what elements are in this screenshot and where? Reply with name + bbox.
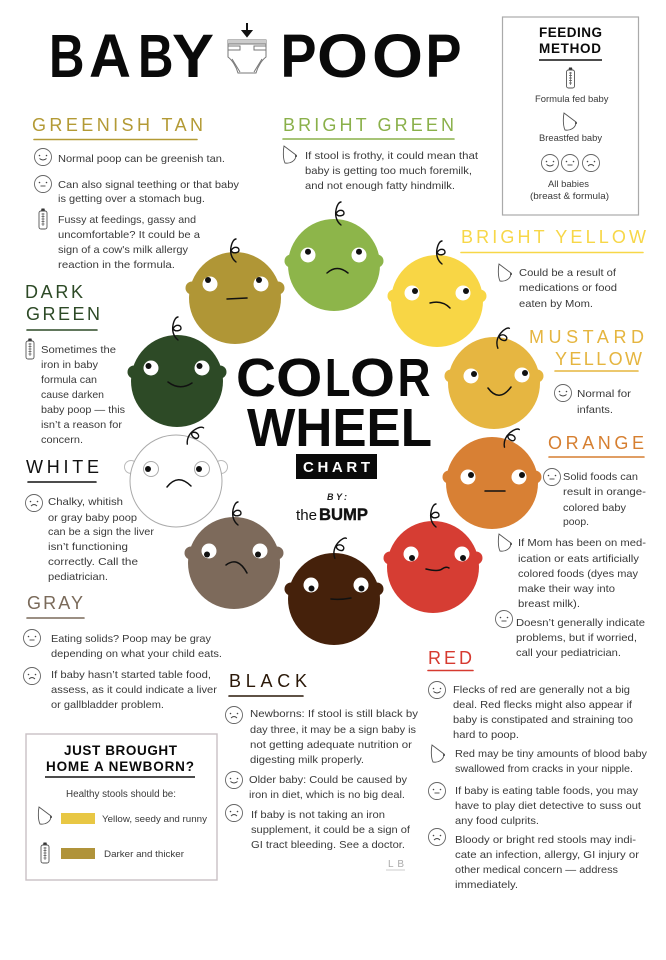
text: frothy stool bbox=[305, 150, 478, 192]
text: frothy stool: and not enough fatty hindmilk. bbox=[305, 180, 455, 192]
section: bright yellow bbox=[461, 227, 646, 310]
text: chalky: pediatrician. bbox=[48, 571, 108, 583]
text: bloody stools: cate an infection, allergy, GI injury or bbox=[455, 849, 640, 861]
icon: breast bbox=[431, 745, 445, 762]
icon: bottle bbox=[566, 68, 574, 88]
heading: color wheel: O bbox=[350, 348, 395, 408]
credit: by the bump: BY: bbox=[327, 492, 347, 502]
heading: red: RED bbox=[428, 648, 472, 668]
text: flecks of red: deal. Red flecks might also appear if bbox=[453, 699, 632, 711]
text: not generally problems: Doesn’t generally indicate bbox=[516, 617, 645, 629]
icon: sad face bbox=[226, 706, 242, 724]
text: iron supplement: supplement, it could be a sign of bbox=[251, 824, 410, 836]
text: healthy stools: Healthy stools should be: bbox=[66, 789, 176, 800]
heading: orange: ORANGE bbox=[548, 433, 644, 453]
text: breastfed baby: Breastfed baby bbox=[539, 133, 602, 144]
text: fussy at feedings bbox=[58, 214, 200, 271]
heading: greenish tan: GREENISH TAN bbox=[32, 115, 203, 135]
baby: red bbox=[384, 504, 482, 613]
text: teething: is getting over a stomach bug. bbox=[58, 193, 205, 205]
text: iron supplement bbox=[251, 809, 410, 851]
credit: by the bump bbox=[296, 492, 368, 524]
signature: LB bbox=[388, 859, 404, 870]
text: normal for infants: infants. bbox=[577, 404, 613, 416]
swatch: dark tan bbox=[61, 848, 95, 859]
heading: mustard yellow bbox=[529, 327, 644, 371]
heading: color wheel bbox=[236, 348, 432, 458]
text: newborns bbox=[250, 708, 419, 766]
baby: bright yellow bbox=[388, 241, 486, 347]
text: eating solids bbox=[51, 633, 222, 660]
heading: bright green: BRIGHT GREEN bbox=[283, 115, 454, 135]
text: fussy at feedings: uncomfortable? It could be a bbox=[58, 229, 200, 241]
text: iron in formula: isn’t a reason for bbox=[41, 419, 123, 431]
icon: smile face bbox=[554, 384, 572, 402]
title: Baby Poop: O bbox=[372, 22, 423, 90]
text: table food: or gallbladder problem. bbox=[51, 699, 164, 711]
baby: black bbox=[284, 536, 384, 645]
text: bloody stools bbox=[455, 834, 640, 891]
section: gray bbox=[24, 593, 222, 711]
text: mom medication: colored foods (dyes may bbox=[518, 568, 639, 580]
text: all babies: All babies bbox=[548, 179, 589, 190]
text: yellow seedy: Yellow, seedy and runny bbox=[102, 814, 207, 825]
baby: greenish tan bbox=[186, 239, 284, 344]
icon: neutral face bbox=[428, 782, 446, 800]
section: mustard yellow bbox=[529, 327, 644, 416]
text: tiny amounts of blood bbox=[455, 748, 648, 775]
label: chart: CHART bbox=[303, 459, 370, 476]
text: all babies: (breast & formula) bbox=[530, 191, 609, 202]
text: mom medication: breast milk). bbox=[518, 598, 580, 610]
heading: newborn: HOME A NEWBORN? bbox=[46, 759, 194, 774]
heading: bright yellow: BRIGHT YELLOW bbox=[461, 227, 646, 247]
section: bright green bbox=[283, 115, 478, 192]
text: formula fed baby: Formula fed baby bbox=[535, 94, 609, 105]
section: white bbox=[26, 457, 155, 583]
title: Baby Poop: P bbox=[280, 22, 316, 90]
heading: feeding method: FEEDING bbox=[539, 25, 602, 40]
baby: bright green bbox=[284, 202, 384, 311]
text: solid foods: colored baby bbox=[563, 502, 627, 514]
title: Baby Poop: A bbox=[89, 22, 131, 90]
panel: feeding method bbox=[502, 17, 638, 215]
text: solid foods bbox=[563, 471, 647, 528]
heading: color wheel: R bbox=[398, 348, 430, 408]
text: chalky: isn’t functioning bbox=[48, 541, 128, 553]
text: bloody stools: immediately. bbox=[455, 879, 518, 891]
text: mom medication: make their way into bbox=[518, 583, 615, 595]
text: all babies bbox=[530, 179, 609, 202]
title: Baby Poop: P bbox=[426, 22, 462, 90]
icon: neutral face bbox=[496, 610, 512, 628]
text: table food bbox=[51, 669, 218, 711]
baby: white bbox=[124, 424, 228, 527]
icon: neutral face bbox=[24, 630, 40, 646]
baby: dark green bbox=[128, 317, 226, 427]
text: medications: eaten by Mom. bbox=[519, 298, 593, 310]
section: dark green bbox=[25, 282, 125, 446]
text: frothy stool: If stool is frothy, it could mean that bbox=[305, 150, 478, 162]
text: darker thicker: Darker and thicker bbox=[104, 849, 184, 860]
heading: feeding method: METHOD bbox=[539, 41, 601, 56]
text: not generally problems: call your pediatrician. bbox=[516, 647, 621, 659]
text: iron in formula: baby poop — this bbox=[41, 404, 125, 416]
heading: color wheel: C bbox=[236, 348, 276, 408]
text: flecks of red: baby is constipated and straining too bbox=[453, 714, 633, 726]
text: newborns: digesting milk properly. bbox=[250, 754, 364, 766]
icon: bottle bbox=[39, 208, 47, 229]
title: Baby Poop: B bbox=[49, 22, 84, 90]
text: mom medication bbox=[518, 537, 647, 610]
text: medications: Could be a result of bbox=[519, 267, 616, 279]
text: teething bbox=[58, 179, 240, 205]
title: Baby Poop: B bbox=[138, 22, 174, 90]
text: iron supplement: GI tract bleeding. See a doctor. bbox=[251, 839, 405, 851]
credit: by the bump: BUMP bbox=[319, 506, 368, 524]
heading: mustard yellow: YELLOW bbox=[555, 349, 642, 369]
text: flecks of red: hard to poop. bbox=[453, 729, 519, 741]
icon: smile face bbox=[34, 148, 52, 166]
text: mom medication: If Mom has been on med- bbox=[518, 537, 647, 549]
heading: dark green: GREEN bbox=[26, 304, 100, 324]
text: not generally problems: problems, but if worried, bbox=[516, 632, 637, 644]
icon: sad face bbox=[24, 668, 40, 684]
text: table foods: any food culprits. bbox=[455, 815, 539, 827]
text: iron in formula: Sometimes the bbox=[41, 344, 116, 356]
text: mom medication: ication or eats artificially bbox=[518, 553, 640, 565]
icon: breast bbox=[283, 146, 297, 163]
text: normal for infants: Normal for bbox=[577, 388, 632, 400]
heading: black: BLACK bbox=[229, 671, 307, 691]
text: newborns: not getting adequate nutrition or bbox=[250, 739, 413, 751]
text: newborns: Newborns: If stool is still black by bbox=[250, 708, 419, 720]
text: older baby: iron in diet, which is no big deal. bbox=[249, 789, 405, 801]
text: iron in formula: cause darken bbox=[41, 389, 104, 401]
text: chalky bbox=[48, 496, 155, 583]
text: chalky: correctly. Call the bbox=[48, 556, 138, 568]
text: iron in formula: concern. bbox=[41, 434, 83, 446]
text: medications bbox=[519, 267, 617, 310]
text: flecks of red: Flecks of red are generally not a big bbox=[453, 684, 630, 696]
heading: gray: GRAY bbox=[27, 593, 83, 613]
section: black bbox=[226, 671, 419, 870]
icon: breast bbox=[498, 264, 512, 281]
icon: bottle bbox=[26, 338, 34, 359]
swatch: yellow bbox=[61, 813, 95, 824]
text: medications: medications or food bbox=[519, 282, 617, 294]
heading: mustard yellow: MUSTARD bbox=[529, 327, 644, 347]
text: normal for infants bbox=[577, 388, 632, 416]
text: iron in formula: formula can bbox=[41, 374, 97, 386]
text: table foods bbox=[455, 785, 641, 827]
icon: three faces bbox=[542, 154, 600, 172]
text: table food: assess, as it could indicate a liver bbox=[51, 684, 218, 696]
text: newborns: day three, it may be a sign baby is bbox=[250, 724, 416, 736]
text: fussy at feedings: reaction in the formula. bbox=[58, 259, 175, 271]
icon: sad face bbox=[226, 804, 242, 822]
title: Baby Poop bbox=[49, 22, 462, 90]
heading: white: WHITE bbox=[26, 457, 99, 477]
icon: smile face bbox=[428, 682, 446, 698]
text: tiny amounts of blood: Red may be tiny amounts of blood baby bbox=[455, 748, 648, 760]
color wheel center title bbox=[236, 348, 432, 524]
heading: newborn bbox=[45, 743, 195, 777]
text: iron supplement: If baby is not taking an iron bbox=[251, 809, 385, 821]
section: orange bbox=[496, 433, 647, 659]
text: solid foods: Solid foods can bbox=[563, 471, 638, 483]
text: eating solids: depending on what your child eats. bbox=[51, 648, 222, 660]
label: chart bbox=[296, 454, 377, 479]
title: Baby Poop: O bbox=[317, 22, 368, 90]
text: table foods: If baby is eating table foods, you may bbox=[455, 785, 639, 797]
icon: breast bbox=[498, 534, 512, 551]
text: iron in formula: iron in baby bbox=[41, 359, 99, 371]
text: fussy at feedings: sign of a cow's milk allergy bbox=[58, 244, 189, 256]
text: normal poop: Normal poop can be greenish tan. bbox=[58, 153, 225, 165]
section: red bbox=[428, 648, 648, 891]
heading: feeding method bbox=[539, 25, 602, 60]
icon: neutral face bbox=[544, 468, 560, 486]
heading: color wheel: WHEEL bbox=[247, 398, 432, 458]
heading: color wheel: O bbox=[276, 348, 322, 408]
text: chalky: or gray baby poop bbox=[48, 512, 137, 524]
section: greenish tan bbox=[32, 115, 240, 271]
text: frothy stool: baby is getting too much foremilk, bbox=[305, 165, 472, 177]
baby: gray bbox=[184, 502, 284, 609]
title: Baby Poop: Y bbox=[172, 22, 214, 90]
text: fussy at feedings: Fussy at feedings, gassy and bbox=[58, 214, 196, 226]
text: flecks of red bbox=[453, 684, 633, 741]
icon: neutral face bbox=[34, 176, 52, 192]
baby: orange bbox=[442, 426, 542, 529]
text: teething: Can also signal teething or that baby bbox=[58, 179, 240, 191]
icon: bottle bbox=[41, 842, 49, 863]
icon: diaper with arrow bbox=[228, 23, 266, 73]
text: chalky: Chalky, whitish bbox=[48, 496, 123, 508]
heading: dark green bbox=[25, 282, 100, 330]
heading: color wheel: L bbox=[325, 348, 350, 408]
baby: mustard yellow bbox=[444, 326, 544, 429]
text: tiny amounts of blood: swallowed from cracks in your nipple. bbox=[455, 763, 633, 775]
icon: sad face bbox=[26, 494, 42, 512]
icon: breast bbox=[38, 807, 52, 824]
icon: breast bbox=[563, 113, 577, 130]
panel: just brought home a newborn bbox=[26, 734, 217, 880]
credit: by the bump: the bbox=[296, 507, 317, 524]
text: bloody stools: Bloody or bright red stools may indi- bbox=[455, 834, 637, 846]
text: bloody stools: other medical concern — address bbox=[455, 864, 618, 876]
text: older baby: Older baby: Could be caused by bbox=[249, 774, 408, 786]
text: eating solids: Eating solids? Poop may be gray bbox=[51, 633, 212, 645]
icon: sad face bbox=[428, 828, 446, 846]
heading: dark green: DARK bbox=[25, 282, 83, 302]
text: not generally problems bbox=[516, 617, 645, 659]
text: iron in formula bbox=[41, 344, 125, 446]
text: older baby bbox=[249, 774, 408, 801]
text: chalky: can be a sign the liver bbox=[48, 526, 155, 538]
text: table foods: have to play diet detective to suss out bbox=[455, 800, 641, 812]
icon: smile face bbox=[226, 772, 242, 788]
heading: newborn: JUST BROUGHT bbox=[64, 743, 178, 758]
text: solid foods: poop. bbox=[563, 516, 589, 528]
text: table food: If baby hasn’t started table food, bbox=[51, 669, 211, 681]
text: solid foods: result in orange- bbox=[563, 486, 647, 498]
